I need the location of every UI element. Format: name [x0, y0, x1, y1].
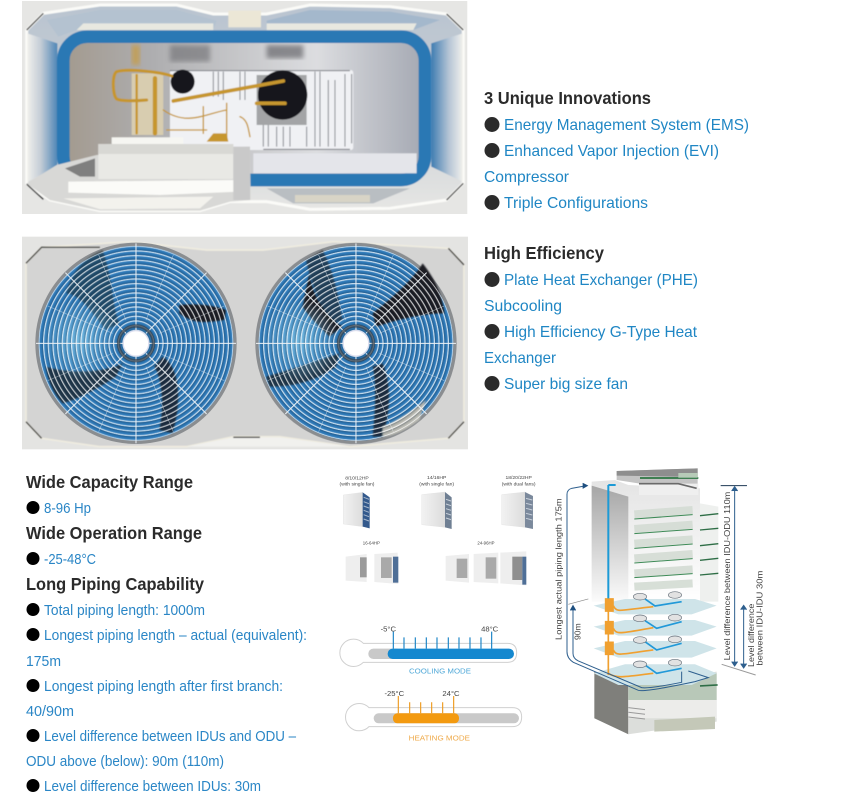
heading: 3 Unique Innovations: 3 Unique Innovations [484, 88, 651, 108]
label: IDU-IDU 30m: between IDU-IDU 30m [755, 570, 764, 666]
list: piping: ODU above (below): 90m (110m) [26, 754, 224, 770]
list: operation range [26, 552, 96, 568]
thermometer: heating mode: -25°C [384, 689, 405, 698]
label: 175m: Longest actual piping length 175m [554, 498, 563, 640]
lower-left cover [27, 147, 251, 211]
list: piping: 175m [26, 654, 61, 670]
unit combination: 16-64HP: 16-64HP [363, 541, 380, 546]
heat-exchanger serpentine panel [170, 70, 353, 150]
list: innovations [484, 117, 749, 212]
list: piping: Level difference between IDUs: 30m [44, 779, 261, 795]
unit: 8/10/12HP: (with single fan) [340, 481, 375, 487]
arrow: level difference IDU-ODU [721, 486, 756, 675]
thermometer: heating mode [346, 689, 522, 743]
list: efficiency: Super big size fan [504, 376, 628, 393]
heading: Wide Capacity Range: Wide Capacity Range [26, 472, 193, 492]
unit: 14/16HP: (with single fan) [419, 481, 454, 487]
heading: Wide Operation Range: Wide Operation Range [26, 523, 202, 543]
list: capacity [26, 501, 91, 517]
label: IDU-ODU 110m: Level difference between IDU-ODU 110m [723, 491, 732, 660]
photo: twin fans front view [22, 237, 468, 449]
orange refrigerant pipes [606, 598, 653, 677]
list: innovations: Energy Management System (EMS) [504, 117, 749, 134]
building piping diagram [554, 468, 764, 734]
list: efficiency: Exchanger [484, 350, 557, 367]
list: innovations: Triple Configurations [504, 195, 648, 212]
unit: 14/16HP [419, 475, 454, 529]
unit combination: 16-64HP [346, 541, 398, 584]
floor slabs [594, 599, 717, 685]
heading: High Efficiency: High Efficiency [484, 243, 604, 263]
unit combination: 24-96HP [446, 541, 526, 585]
list: piping: 40/90m [26, 704, 74, 720]
list: piping: Total piping length: 1000m [44, 603, 205, 619]
label: 90m: 90m [573, 623, 582, 640]
unit: 18/20/22HP: 18/20/22HP [505, 475, 532, 481]
list: efficiency [484, 272, 698, 393]
thermometer: heating mode: HEATING MODE [409, 734, 470, 743]
unit: 8/10/12HP: 8/10/12HP [345, 476, 369, 482]
compressor and fan base [132, 70, 307, 135]
unit combination: 24-96HP: 24-96HP [477, 541, 495, 546]
list: operation range: -25-48°C [44, 552, 96, 568]
list: efficiency: Subcooling [484, 298, 562, 315]
product lineup [340, 475, 536, 585]
thermometer: heating mode: 24°C [442, 689, 460, 698]
arrow: longest actual piping [567, 483, 708, 691]
photo: outdoor unit interior [22, 1, 467, 214]
lower floor highlight [253, 153, 417, 173]
heading: Long Piping Capability: Long Piping Capability [26, 574, 204, 594]
copper piping [113, 70, 285, 142]
list: innovations: Enhanced Vapor Injection (EVI) [504, 143, 719, 160]
fan: left [35, 243, 237, 444]
unit: 8/10/12HP [340, 476, 375, 528]
base floors [594, 672, 718, 734]
list: piping [26, 603, 307, 795]
thermometer: cooling mode [340, 624, 517, 675]
list: piping: Longest piping length – actual (equivalent): [44, 628, 307, 644]
thermometer: cooling mode: COOLING MODE [409, 666, 471, 675]
label: IDU-IDU 30m: Level difference [747, 603, 756, 667]
list: piping: Level difference between IDUs and ODU – [44, 729, 297, 745]
label: IDU-IDU 30m [747, 570, 764, 667]
indoor units and blue pipes [608, 485, 682, 673]
building upper tower [592, 468, 718, 602]
unit: 14/16HP: 14/16HP [427, 475, 447, 481]
thermometer: cooling mode: -5°C [381, 624, 396, 633]
list: efficiency: High Efficiency G-Type Heat [504, 324, 698, 341]
list: efficiency: Plate Heat Exchanger (PHE) [504, 272, 698, 289]
list: innovations: Compressor [484, 169, 570, 186]
list: capacity: 8-96 Hp [44, 501, 91, 517]
fan: right [255, 243, 457, 444]
unit: 18/20/22HP [502, 475, 536, 529]
thermometer: cooling mode: 48°C [481, 624, 499, 633]
unit: 18/20/22HP: (with dual fans) [502, 481, 536, 487]
list: piping: Longest piping length after first branch: [44, 679, 283, 695]
